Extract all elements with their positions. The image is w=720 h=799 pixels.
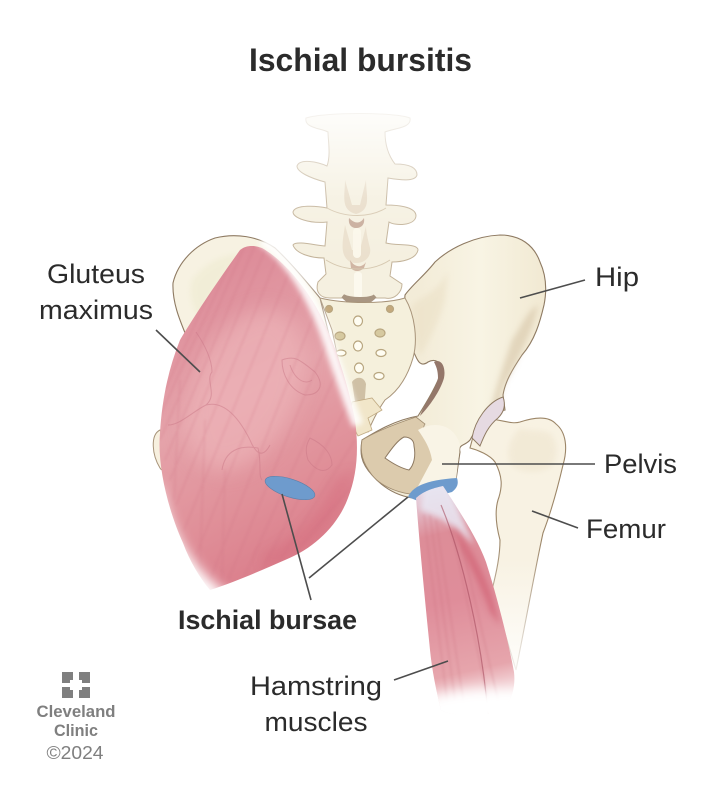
leader lines [156, 280, 595, 680]
gluteus top-right white fade [262, 240, 358, 425]
copyright: ©2024 [46, 743, 104, 763]
sacrum [320, 298, 415, 436]
leader: ischial bursae left [282, 494, 311, 600]
ischial tuberosity [415, 425, 460, 492]
hamstring bottom fade [436, 681, 514, 714]
femur [470, 418, 566, 670]
label: pelvis: Pelvis [604, 449, 677, 479]
bursa: right [408, 478, 458, 501]
ilium lateral shading [490, 305, 538, 412]
label: gluteus maximus: maximus [39, 295, 153, 325]
label: femur: Femur [586, 514, 666, 544]
gluteus muscle fibres [174, 391, 207, 471]
ilium contour shading [411, 270, 448, 356]
left ilium wing [173, 236, 340, 380]
leader: gluteus maximus [156, 330, 200, 372]
pubic ramus [361, 417, 435, 494]
icon: cleveland clinic cross [62, 672, 90, 698]
gluteus maximus [148, 240, 358, 603]
sciatic notch [420, 361, 445, 416]
logo: cleveland clinic [36, 672, 116, 763]
leader: hamstring [394, 661, 448, 680]
left ilium shading [190, 254, 240, 318]
infographic: ischial bursitis anatomy [37, 48, 676, 759]
gluteus lower-left white fade [148, 480, 235, 603]
deep muscle contours [168, 332, 332, 480]
leader: ischial bursae right [309, 497, 408, 578]
sacral foramina [326, 306, 394, 380]
label: hip: Hip [595, 262, 639, 292]
vertebra: upper faded [293, 114, 418, 298]
hamstring tendon highlight [420, 484, 474, 545]
bursa: left [262, 471, 318, 505]
hamstring muscles [416, 486, 514, 714]
label: hamstring muscles: Hamstring [250, 671, 382, 701]
hip joint: femoral head cartilage [472, 397, 504, 446]
leader: hip [520, 280, 585, 298]
leader: femur [532, 511, 578, 528]
obturator foramen [385, 437, 415, 470]
label: ischial bursae: Ischial bursae [178, 605, 357, 635]
hamstring red belly [452, 525, 500, 625]
sacral hiatus [352, 378, 366, 410]
title: Ischial bursitis [249, 42, 472, 78]
logo wordmark line 2: Clinic [54, 721, 98, 740]
coccyx [350, 398, 382, 436]
leader: pelvis [442, 463, 595, 465]
gluteus light patch [189, 309, 301, 471]
left femur trochanter [153, 430, 168, 470]
gluteus darker lower band [270, 478, 350, 564]
lumbar spine [290, 105, 425, 304]
right ilium and ischium [361, 235, 546, 498]
label: gluteus maximus: Gluteus [47, 259, 145, 289]
hamstring fibres [430, 516, 496, 688]
label: hamstring muscles: muscles [264, 707, 368, 737]
logo wordmark: Cleveland [36, 702, 116, 721]
